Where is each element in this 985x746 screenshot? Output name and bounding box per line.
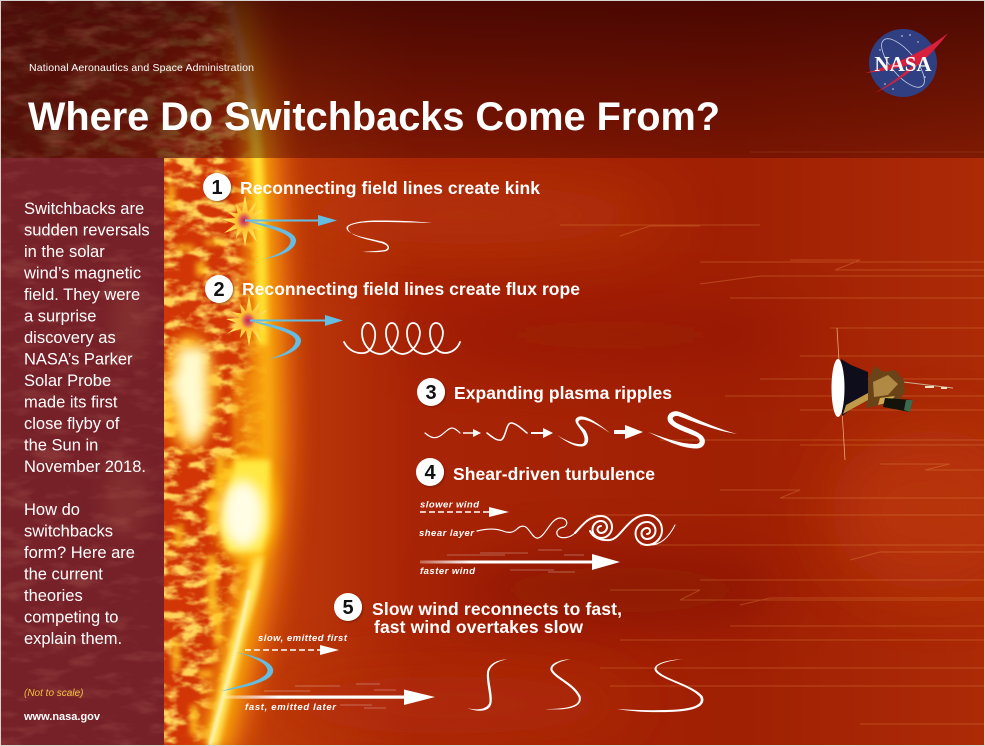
- number badge 1: 1: [211, 177, 223, 199]
- website: www.nasa.gov: [23, 711, 101, 723]
- ripple arrows: [463, 425, 643, 439]
- slower wind arrow: [420, 507, 509, 517]
- theory 5: [221, 593, 703, 713]
- sidebar question text: switchbacks: [24, 522, 113, 540]
- slow wind label: slow, emitted first: [258, 633, 348, 644]
- icon: reconnection burst: [222, 195, 266, 246]
- heading 5: fast wind overtakes slow: [374, 617, 583, 637]
- sidebar intro text: discovery as: [24, 329, 116, 347]
- heading 3: Expanding plasma ripples: [454, 383, 672, 403]
- sidebar intro text: wind’s magnetic: [23, 264, 141, 282]
- sidebar question text: the current: [24, 566, 103, 584]
- theory 3: [417, 378, 737, 449]
- shear layer label: shear layer: [419, 528, 475, 539]
- blue arrow and field line: [250, 315, 343, 359]
- slower wind label: slower wind: [420, 500, 479, 510]
- icon: Parker Solar Probe: [832, 328, 953, 460]
- heading 4: Shear-driven turbulence: [453, 464, 655, 484]
- number badge 2: 2: [213, 279, 225, 301]
- number badge 5: [334, 593, 362, 621]
- icon: NASA logo: NASA: [874, 52, 932, 76]
- sidebar intro text: field. They were: [24, 286, 140, 304]
- sidebar intro text: close flyby of: [24, 415, 120, 433]
- heading 2: Reconnecting field lines create flux rope: [242, 279, 580, 299]
- ripple sequence: [425, 411, 737, 449]
- number badge 1: [203, 173, 231, 201]
- blue arrow and field line: [245, 215, 337, 259]
- sidebar intro text: a surprise: [24, 308, 96, 326]
- number badge 3: [417, 378, 445, 406]
- sidebar intro text: November 2018.: [24, 458, 146, 476]
- faster wind label: faster wind: [420, 566, 475, 577]
- sidebar intro text: in the solar: [24, 243, 105, 261]
- scale note: (Not to scale): [24, 688, 83, 699]
- agency line: National Aeronautics and Space Administration: [29, 62, 254, 74]
- heading 5: Slow wind reconnects to fast,: [372, 599, 622, 619]
- number badge 4: [416, 458, 444, 486]
- blue field line: [221, 652, 273, 691]
- number badge 3: 3: [425, 382, 437, 404]
- slow wind arrow: [245, 645, 339, 655]
- sidebar question text: form? Here are: [24, 544, 135, 562]
- icon: reconnection burst: [226, 295, 270, 346]
- theory 1: [203, 173, 540, 259]
- sidebar intro text: Solar Probe: [24, 372, 111, 390]
- kink squiggle: [346, 220, 432, 252]
- fast wind streaks: [264, 684, 396, 708]
- sidebar intro text: sudden reversals: [24, 222, 150, 240]
- sidebar question text: competing to: [24, 608, 118, 626]
- sidebar intro text: Switchbacks are: [24, 200, 144, 218]
- sidebar question text: How do: [24, 501, 80, 519]
- sidebar intro text: NASA’s Parker: [24, 350, 133, 368]
- number badge 5: 5: [342, 597, 354, 619]
- number badge 4: 4: [424, 462, 436, 484]
- fast wind label: fast, emitted later: [245, 702, 337, 713]
- fast wind arrow: [225, 690, 435, 705]
- shear vortices: [477, 515, 675, 545]
- number badge 2: [205, 275, 233, 303]
- heading 1: Reconnecting field lines create kink: [240, 178, 540, 198]
- title: Where Do Switchbacks Come From?: [28, 95, 720, 139]
- overtaking squiggles: [467, 659, 703, 712]
- panel: sidebar: [0, 158, 164, 746]
- header band: [0, 0, 985, 158]
- theory 4: [416, 458, 675, 577]
- faster wind arrow: [420, 554, 620, 570]
- sidebar question text: explain them.: [24, 630, 122, 648]
- flux rope coil: [344, 323, 460, 354]
- sidebar intro text: made its first: [24, 394, 118, 412]
- theory 2: [205, 275, 580, 359]
- sidebar intro text: the Sun in: [24, 436, 98, 454]
- faster wind streaks: [447, 550, 584, 572]
- sidebar question text: theories: [24, 587, 83, 605]
- icon: NASA logo: [865, 29, 948, 97]
